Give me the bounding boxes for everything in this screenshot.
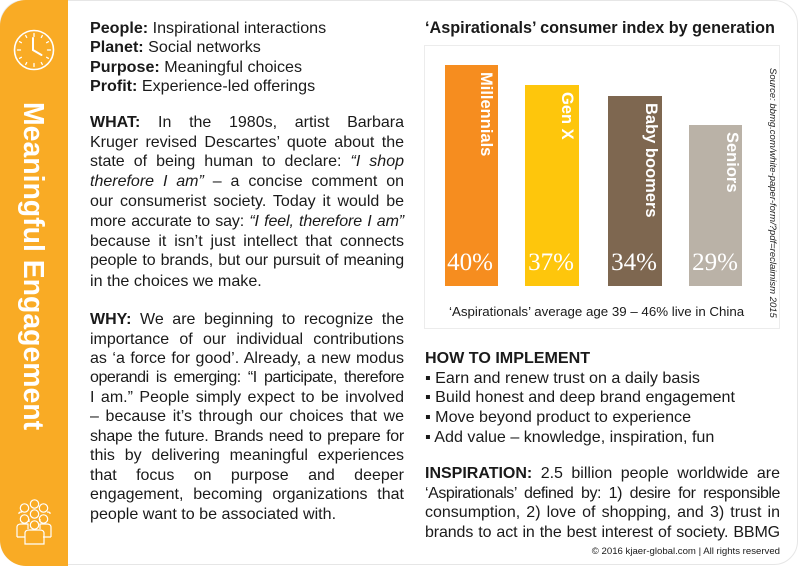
text block: what: state of being human to declare: “I shop [90, 153, 404, 170]
text block: what: Kruger revised Descartes’ quote about the [90, 134, 404, 151]
copyright: © 2016 kjaer-global.com | All rights reserved [592, 546, 780, 557]
bar: Millennials [445, 65, 498, 286]
text block: four Ps: People: Inspirational interactions [90, 19, 326, 37]
text block: inspiration: brands to act in the best interest of society. BBMG [425, 524, 780, 541]
icon: clock [14, 30, 54, 70]
sidebar title: Meaningful Engagement [17, 102, 49, 430]
text block: inspiration [425, 465, 780, 541]
text block: what: because it isn’t just intellect that connects [90, 233, 404, 250]
text block: inspiration: ‘Aspirationals’ defined by: 1) desire for responsible [425, 485, 780, 502]
text block: why: shape the future. Brands need to prepare for [90, 428, 404, 445]
text block: why: operandi is emerging: “I participate, therefore [90, 369, 404, 386]
text block: four Ps [90, 19, 326, 95]
how to implement: ▪ Add value – knowledge, inspiration, fun [425, 428, 714, 446]
value: 40%: 40% [447, 249, 493, 276]
text block: four Ps: Purpose: Meaningful choices [90, 58, 302, 76]
bar label: Millennials: Millennials [477, 72, 495, 156]
text block: inspiration: consumption, 2) love of shopping, and 3) trust in [425, 504, 780, 521]
text block: what: people to brands, but our pursuit of meaning [90, 252, 404, 269]
text block: four Ps: Planet: Social networks [90, 38, 261, 56]
text block: why: WHY: We are beginning to recognize the [90, 311, 404, 328]
text block: what: more accurate to say: “I feel, therefore I am” [90, 213, 404, 230]
text block: what: therefore I am” – a concise comment on [90, 173, 404, 190]
value: 37%: 37% [528, 249, 574, 276]
text block: why: I am.” People simply expect to be involved [90, 389, 404, 406]
text block: what: in the choices we make. [90, 272, 262, 290]
text block: why: – because it’s through our choices that we [90, 408, 404, 425]
how to implement: ▪ Earn and renew trust on a daily basis [425, 369, 700, 387]
panel: bar chart [424, 45, 780, 329]
heading: HOW TO IMPLEMENT [425, 349, 590, 367]
text block: why: importance of our individual contributions [90, 331, 404, 348]
text block: what: our consumerist society. Today it would be [90, 193, 404, 210]
orange sidebar [0, 0, 68, 566]
text block: why: engagement, becoming organizations that [90, 486, 404, 503]
text block: why: that focus on purpose and deeper [90, 467, 404, 484]
text block: why: this by delivering meaningful experiences [90, 447, 404, 464]
bar: Seniors [689, 125, 742, 286]
bar: Baby boomers [608, 96, 662, 286]
text block: what [90, 114, 405, 290]
chart caption: ‘Aspirationals’ average age 39 – 46% live in China [449, 304, 744, 319]
chart heading: ‘Aspirationals’ consumer index by generation [425, 19, 775, 37]
text block: what: WHAT: In the 1980s, artist Barbara [90, 114, 404, 131]
how to implement [425, 349, 735, 446]
how to implement: ▪ Build honest and deep brand engagement [425, 388, 735, 406]
text block: why: people want to be associated with. [90, 505, 336, 523]
icon: group of people [16, 499, 52, 545]
how to implement: ▪ Move beyond product to experience [425, 408, 691, 426]
bar: Gen X [525, 85, 579, 286]
bar label: Baby boomers: Baby boomers [642, 103, 660, 218]
text block: inspiration: INSPIRATION: 2.5 billion people worldwide are [425, 465, 780, 482]
value: 29%: 29% [692, 249, 738, 276]
bar label: Gen X: Gen X [558, 92, 576, 140]
source note: Source: bbmg.com/white-paper-form/?pdf=reclaimism 2015 [767, 68, 778, 318]
value: 34%: 34% [611, 249, 657, 276]
bar label: Seniors: Seniors [723, 132, 741, 193]
text block: why [90, 311, 404, 523]
text block: why: as ‘a force for good’. Already, a new modus [90, 350, 404, 367]
text block: four Ps: Profit: Experience-led offerings [90, 77, 315, 95]
